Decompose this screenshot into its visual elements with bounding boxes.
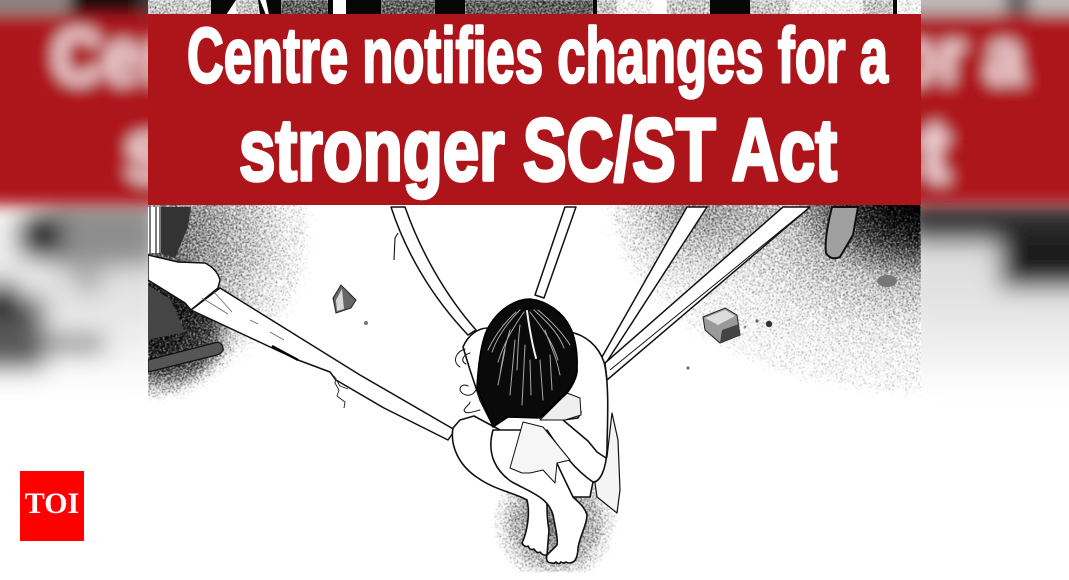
foot shadow stipple bbox=[485, 452, 625, 572]
TOI logo: TOI bbox=[25, 487, 79, 520]
central illustration panel bbox=[148, 0, 921, 420]
backdrop blurred headline: stronger SC/ST Act bbox=[124, 101, 950, 200]
strip: top left bbox=[391, 207, 476, 335]
left attackers: bar bbox=[148, 342, 223, 372]
strip: top centre bbox=[535, 207, 576, 298]
left lower shading bbox=[0, 205, 160, 390]
hand gripping fabric bbox=[148, 255, 220, 310]
band bbox=[148, 14, 921, 205]
right side cloth bbox=[595, 413, 620, 513]
solid black areas bbox=[211, 0, 897, 15]
hand under face bbox=[540, 393, 581, 420]
rock right bbox=[686, 308, 772, 370]
backdrop red band bbox=[0, 14, 1069, 205]
textured crowd hatching bbox=[148, 0, 921, 15]
stipple shading on ground bbox=[148, 200, 921, 420]
hair bbox=[477, 299, 577, 427]
loose curls bbox=[456, 349, 480, 413]
left attackers: striped cloth bbox=[148, 207, 161, 253]
backdrop top strip bbox=[0, 0, 70, 15]
backdrop headline band bbox=[0, 0, 1069, 205]
strip: right lower bbox=[605, 207, 810, 380]
fabric strips tying the figure bbox=[191, 207, 810, 440]
blurred side backdrop bbox=[0, 0, 1069, 395]
right lower shading bbox=[905, 205, 1069, 395]
crowd strip at top bbox=[148, 0, 921, 15]
backdrop soft shading bbox=[0, 200, 1069, 395]
right attacker shadow blob bbox=[877, 275, 897, 287]
headline band bbox=[148, 11, 921, 205]
far leg and right foot bbox=[491, 430, 587, 564]
TOI logo bbox=[20, 471, 84, 541]
headline line 2: stronger SC/ST Act bbox=[239, 100, 837, 199]
torso and back bbox=[463, 328, 608, 497]
central torn cloth bbox=[510, 422, 570, 483]
left attackers: dark figure bbox=[161, 207, 191, 258]
near leg and left foot bbox=[452, 416, 549, 555]
backdrop blurred headline bbox=[52, 12, 1025, 200]
left attackers: dark wedge below hand bbox=[148, 285, 185, 340]
right attacker finger bbox=[826, 207, 858, 258]
strip: held by left hand bbox=[191, 288, 455, 440]
crouching figure bbox=[452, 299, 620, 564]
rock left bbox=[333, 285, 368, 325]
panel paper bbox=[148, 0, 921, 405]
strip: right upper bbox=[602, 207, 707, 366]
forearm bbox=[547, 393, 606, 482]
